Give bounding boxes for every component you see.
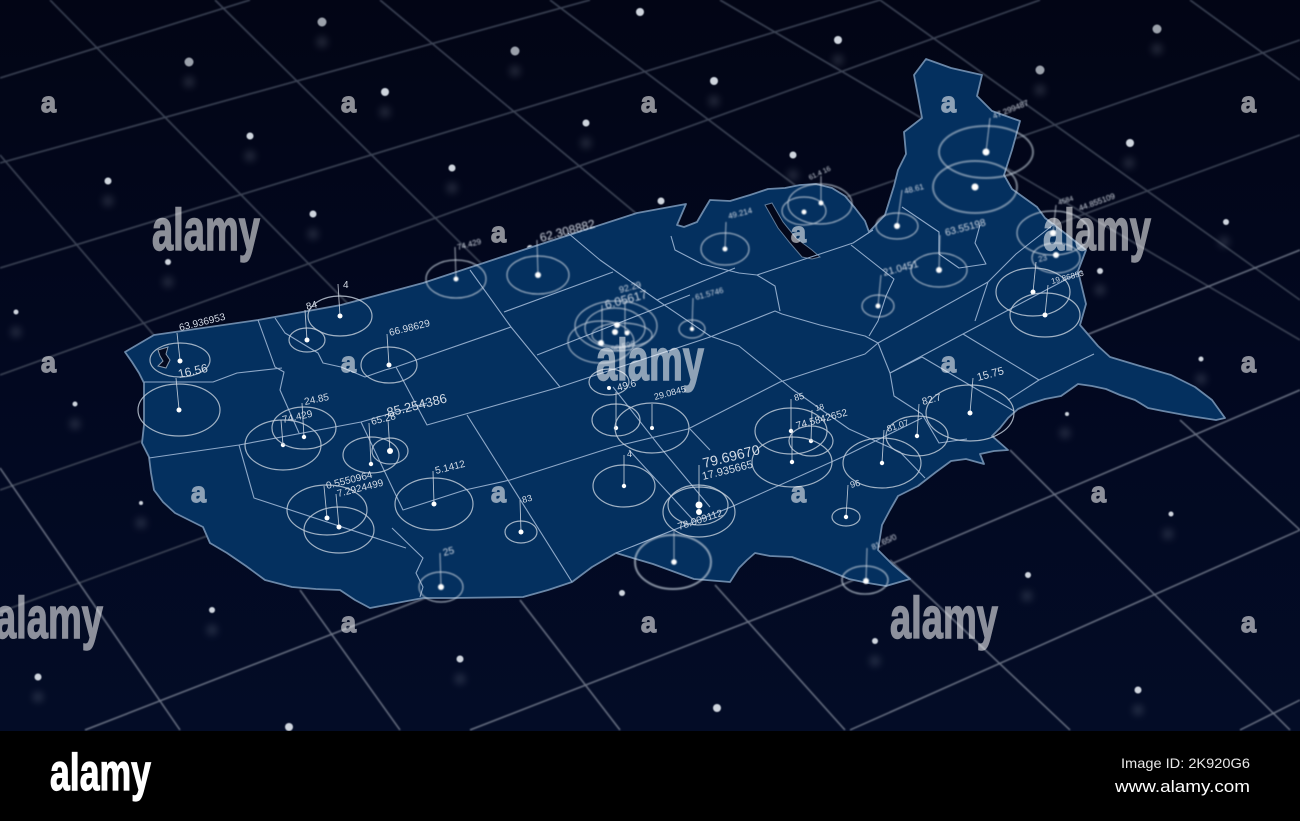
footer logo: alamy [50, 744, 151, 802]
marker: 29.0845 [615, 384, 689, 453]
marker: 23: 23 [1037, 253, 1049, 264]
watermark: small a marks: a [1241, 347, 1257, 379]
watermark: alamy lower right: alamy [890, 586, 998, 651]
marker: 24.85 [272, 392, 336, 449]
watermark: small a marks: a [641, 607, 657, 639]
marker: 62.308882 [507, 217, 597, 294]
marker: 85.254386 [372, 390, 448, 464]
watermark: small a marks: a [341, 347, 357, 379]
marker: maine lower [933, 161, 1017, 213]
watermark: small a marks: a [491, 217, 507, 249]
marker: 25: 25 [442, 545, 456, 559]
marker: 5.1412: 5.1412 [434, 459, 467, 477]
marker: 84 [289, 299, 325, 352]
marker: south tip [842, 532, 899, 594]
marker: maine large: 47.299487 [991, 98, 1030, 121]
marker: 74.5842652 [789, 402, 849, 456]
watermark: small a marks: a [491, 477, 507, 509]
watermark: alamy centre: alamy [596, 328, 704, 393]
marker: 83 [505, 493, 537, 543]
marker: 74.429 west: 74.429 [281, 409, 314, 426]
watermark: small a marks: a [41, 87, 57, 119]
marker: 79.69670 and 17.935665: 79.69670 [701, 441, 762, 471]
marker: 63.936953: 63.936953 [178, 312, 227, 334]
marker: maine large [939, 98, 1033, 178]
marker: 81.07: 81.07 [886, 417, 910, 434]
marker: 82.7: 82.7 [921, 392, 943, 408]
marker: 74.429 north: 74.429 [456, 237, 483, 252]
marker cluster: 6.05 and 92.29: 98.596 [610, 339, 637, 354]
marker: 7.2924499: 7.2924499 [336, 478, 385, 500]
marker: 74.5842652: 18 [814, 402, 826, 413]
marker: 63.55 [911, 217, 987, 287]
marker: 63.55: 63.55198 [944, 217, 987, 239]
marker: 48.61: 48.61 [903, 182, 925, 196]
marker: 79.69670 and 17.935665 [663, 441, 762, 537]
marker: south-central ring [752, 430, 832, 487]
watermark: small a marks: a [941, 87, 957, 119]
watermark: small a marks: a [191, 477, 207, 509]
marker: north-east coast: 4584 [1057, 195, 1075, 207]
watermark: small a marks: a [791, 217, 807, 249]
state borders [144, 207, 1094, 597]
marker: 83: 83 [521, 493, 533, 505]
marker: 5.1412 [395, 459, 473, 530]
watermark: small a marks: a [941, 347, 957, 379]
marker: north-east coast: 44.855109 [1078, 191, 1117, 213]
marker: 4: 4 [343, 280, 349, 291]
marker: 85.254386: 85.254386 [385, 390, 448, 420]
marker: 49.6 [592, 378, 640, 436]
marker: michigan pair: 61.4 16 [808, 166, 832, 182]
marker: 63.936953 [150, 312, 227, 377]
marker: 79.69670 and 17.935665: 78.009112 [677, 508, 725, 533]
watermark: small a marks: a [1091, 477, 1107, 509]
marker: 15.75: 15.75 [976, 365, 1005, 384]
marker: small central [589, 369, 629, 395]
marker: 66.98629: 66.98629 [388, 318, 432, 339]
marker: 19.86 [1010, 268, 1085, 337]
marker: 19.86: 19.86893 [1050, 268, 1085, 286]
marker: 85 [755, 391, 827, 454]
marker: 21.0451 [862, 259, 920, 317]
footer bar [0, 731, 1300, 821]
marker cluster: 6.05 and 92.29: 6.05617 [603, 287, 649, 312]
marker: east ring [996, 262, 1070, 316]
marker: 84: 84 [305, 299, 319, 313]
marker: 21.0451: 21.0451 [882, 259, 920, 279]
marker: 4 central: 4 [627, 449, 632, 459]
marker: north-east coast [1017, 191, 1117, 255]
great lakes cut-out [765, 203, 820, 259]
marker: 16.56: 16.56 [177, 361, 209, 381]
marker: gulf coast [635, 530, 711, 589]
marker: south tip: 81.65/0 [870, 532, 899, 552]
marker: 82.7 [886, 392, 948, 456]
marker: 48.61 [876, 182, 925, 239]
marker: 65.28: 65.28 [370, 411, 397, 428]
marker: 24.85: 24.85 [303, 392, 331, 408]
watermark: alamy upper left: alamy [152, 198, 260, 263]
marker: 49.6: 49.6 [616, 378, 638, 394]
watermark: small a marks: a [791, 477, 807, 509]
marker: 85: 85 [793, 391, 805, 403]
watermark: small a marks [41, 87, 1257, 639]
marker: 4 [308, 280, 372, 336]
marker: michigan pair [782, 166, 852, 225]
marker: 81.07 [843, 417, 921, 488]
marker: 62.308882: 62.308882 [538, 217, 597, 245]
watermark: alamy upper right: alamy [1043, 198, 1151, 263]
watermark: small a marks: a [1241, 607, 1257, 639]
watermark: small a marks: a [341, 87, 357, 119]
watermark: small a marks: a [1241, 87, 1257, 119]
marker: 65.28 [343, 411, 399, 473]
marker: 74.429 north [426, 237, 486, 298]
marker: 49.214: 49.214 [727, 206, 754, 221]
marker: 61.5746: 61.5746 [694, 286, 725, 302]
marker: 0.5550964: 0.5550964 [325, 470, 374, 492]
marker: 66.98629 [361, 318, 432, 383]
data markers [138, 98, 1117, 602]
watermark: small a marks: a [341, 607, 357, 639]
marker cluster: 6.05 and 92.29 [568, 279, 657, 363]
marker: 29.0845: 29.0845 [653, 384, 687, 402]
marker cluster: 6.05 and 92.29: 92.29 [618, 279, 642, 295]
website: www.alamy.com [1114, 777, 1250, 796]
image id: Image ID: 2K920G6 [1121, 755, 1250, 771]
marker: 0.5550964 [287, 470, 374, 535]
marker: 4 central [593, 449, 655, 507]
marker: 49.214 [701, 206, 754, 265]
marker: 61.5746 [679, 286, 725, 338]
marker: 79.69670 and 17.935665: 17.935665 [701, 459, 754, 483]
puget sound inlet [158, 347, 170, 368]
marker: 15.75 [926, 365, 1014, 441]
watermark: small a marks: a [641, 87, 657, 119]
marker: 74.429 west [245, 409, 321, 470]
marker: 16.56 [138, 361, 220, 436]
marker: 7.2924499 [304, 478, 385, 553]
marker: 25 [419, 545, 463, 602]
watermarks [0, 87, 1257, 651]
marker: 23 [1032, 243, 1080, 273]
USA map shape [125, 59, 1225, 608]
watermark: small a marks: a [41, 347, 57, 379]
marker: 96: 96 [849, 478, 861, 490]
marker: 96 [832, 478, 861, 526]
marker: 74.5842652: 74.5842652 [795, 407, 849, 432]
